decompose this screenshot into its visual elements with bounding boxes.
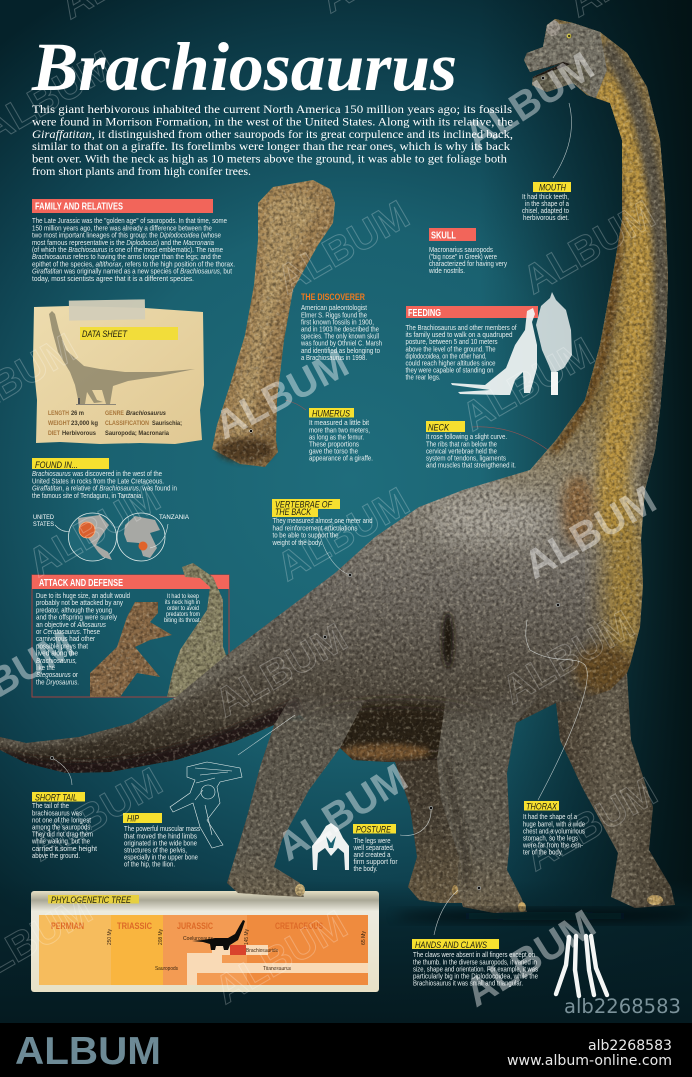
note: neck high: It had to keep [167, 594, 200, 600]
note: neck high: biting its throat. [164, 618, 201, 624]
panel: feeding: The Brachiosaurus and other members of [406, 323, 517, 332]
panel: skull: SKULL [431, 230, 456, 242]
panel: the discoverer: and identified as belonging to [301, 346, 380, 355]
panel: attack and defense: Brachiosaurus, [36, 656, 77, 665]
panel: posture: The legs were [354, 836, 390, 845]
panel: humerus: HUMERUS [312, 408, 351, 420]
panel: skull [428, 228, 507, 275]
note: neck high: predators from [166, 612, 200, 618]
dinosaur: far legs [391, 673, 675, 908]
panel: the discoverer: was found by Othniel C. Marsh [300, 339, 382, 348]
hip skeleton icon [170, 762, 242, 848]
panel: family and relatives: Giraffatitan was originally named as a new species of Brachiosaurus, but [32, 267, 232, 276]
panel: posture [353, 824, 398, 873]
panel: the discoverer: species. The only known skull [301, 332, 379, 341]
panel: phylogenetic tree: PERMIAN [51, 921, 84, 932]
watermarks: ALBUM [270, 192, 417, 303]
panel: neck: system of tendons, ligaments [426, 454, 506, 462]
footer bar: alb2268583 [588, 1038, 672, 1054]
intro text: This giant herbivorous inhabited the current North America 150 million years ago; its fossils [32, 102, 512, 116]
panel: attack and defense: Stegosaurus or [36, 670, 78, 679]
panel: data sheet: CLASSIFICATION [105, 420, 149, 427]
panel: data sheet [33, 299, 204, 444]
icon: small brachiosaurus silhouette [192, 920, 245, 950]
panel: feeding: above the level of the ground. The [406, 344, 496, 353]
panel: feeding: could reach higher altitudes since [406, 358, 496, 368]
panel: hands and claws [412, 939, 538, 988]
panel: data sheet: WEIGHT [48, 420, 70, 427]
panel: feeding: posture, between 5 and 10 meters [406, 337, 498, 346]
panel: feeding: its family used to walk on a quadruped [406, 330, 512, 339]
panel: attack and defense: an objective of Allosaurus [36, 620, 106, 629]
panel: neck: The ribs that ran below the [426, 439, 497, 448]
panel: the discoverer: THE DISCOVERER [301, 292, 365, 302]
panel: humerus: as long as the femur. [309, 432, 364, 441]
panel: humerus: more than two meters, [309, 425, 370, 434]
panel: vertebrae of the back: VERTEBRAE OF [275, 500, 333, 510]
panel: found in [32, 458, 177, 500]
panel: short tail: brachiosaurus was [32, 808, 82, 817]
watermarks: ALBUM [516, 477, 664, 588]
panel: found in: United States in rocks from the Late Cretaceous. [32, 476, 164, 485]
watermark id: alb2268583 [564, 995, 681, 1018]
panel: vertebrae of the back: THE BACK [275, 507, 311, 518]
panel: vertebrae of the back: had reinforcement articulations [272, 523, 358, 532]
panel: data sheet: Saurischia; [152, 420, 182, 427]
panel: vertebrae of the back: to be able to support the [272, 531, 338, 540]
panel: neck: and muscles that strengthened it. [426, 461, 516, 470]
ground shadow [395, 911, 692, 921]
panel: phylogenetic tree: 145 My [244, 929, 250, 945]
panel: attack and defense: the Dryosaurus. [36, 677, 79, 686]
panel: short tail: among the sauropods. [32, 822, 92, 832]
watermarks: ALBUM [494, 602, 642, 713]
panel: attack and defense: probably not be attacked by any [36, 598, 123, 607]
panel: skull: characterized for having very [429, 259, 507, 268]
intro text: Giraffatitan, it distinguished from other sauropods for its great corpulence and its inclined back, [32, 127, 513, 141]
panel: mouth [522, 182, 571, 222]
panel: found in: the famous site of Tendaguru, in Tanzania. [32, 491, 143, 500]
panel: short tail: SHORT TAIL [35, 792, 77, 804]
panel: mouth: It had thick teeth, [522, 192, 569, 201]
title: Brachiosaurus [31, 29, 457, 105]
panel: hip: that moved the hind limbs [124, 831, 197, 840]
panel: the discoverer: a Brachiosaurus in 1998. [301, 353, 367, 362]
panel: family and relatives: (of which the Brachiosaurus is one of the most emblematic). The name [32, 245, 223, 254]
panel: phylogenetic tree: 250 My [107, 929, 113, 945]
panel: humerus: gave the torso the [309, 447, 358, 456]
panel: attack and defense: and the offspring were surely [36, 613, 117, 622]
panel: hip: structures of the pelvis, [124, 846, 187, 854]
panel: feeding: they were capable of standing on [406, 366, 494, 375]
panel: the discoverer [300, 292, 382, 362]
panel: humerus: These proportions [309, 440, 359, 448]
note: neck high: order to avoid [167, 606, 199, 612]
panel: data sheet: LENGTH [48, 410, 69, 417]
watermarks: ALBUM [516, 192, 663, 303]
belly and rump shade [336, 695, 468, 755]
intro text: bent over. With the neck as high as 10 meters above the ground, it was able to get foliage both [32, 152, 507, 166]
panel: thorax: huge barrel, with a wide [523, 819, 585, 828]
panel: family and relatives: 150 million years ago, there was already a difference between the [32, 223, 212, 232]
panel: family and relatives: today, most scientists agree that it is a different species. [32, 274, 194, 283]
intro text: were found in Morrison Formation, in the west of the United States. Along with its relative, the [32, 114, 513, 128]
hands and claws bones icon [556, 936, 607, 996]
globes: United States and Tanzania: STATES [33, 521, 55, 528]
intro text [32, 102, 513, 178]
image: allosaurus [90, 602, 172, 697]
panel: attack and defense: possible preys that [36, 641, 88, 650]
panel: vertebrae of the back [272, 499, 372, 547]
image: sauropod [167, 563, 228, 697]
panel: data sheet: 23,000 kg [71, 420, 98, 427]
watermarks: ALBUM [23, 759, 170, 870]
panel: posture: firm support for [354, 857, 398, 866]
panel: thorax: ter of the body. [523, 848, 563, 857]
watermarks: ALBUM [208, 615, 355, 726]
intro text: from short plants and from high conifer trees. [32, 164, 251, 178]
panel: feeding: diplodocoidea, on the other hand, [406, 351, 486, 360]
panel: thorax: It had the shape of a [523, 812, 578, 821]
watermarks: ALBUM [270, 479, 417, 590]
panel: posture: well separated, [353, 843, 394, 852]
panel: mouth: MOUTH [539, 182, 566, 194]
panel: attack and defense: lived along the [36, 649, 78, 658]
fossil humerus bone [212, 180, 335, 467]
panel: short tail: not one of the longest [32, 815, 91, 824]
panel: family and relatives: two most important lineages of this group: the Diplodocoidea (whose [32, 231, 221, 240]
panel: the discoverer: Elmer S. Riggs found the [301, 310, 367, 319]
panel: neck: It rose following a slight curve. [426, 432, 507, 441]
panel: posture: POSTURE [356, 824, 391, 836]
panel: phylogenetic tree: Coelurosaurs [183, 936, 213, 942]
panel: humerus: It measured a little bit [309, 418, 369, 427]
panel: hands and claws: size, shape and orientation. For example, it was [413, 964, 538, 973]
panel: feeding [406, 292, 572, 395]
panel: phylogenetic tree: CRETACEOUS [275, 921, 323, 932]
watermarks: ALBUM [457, 44, 602, 160]
panel: skull: Macronarius sauropods [429, 245, 493, 254]
panel: neck: NECK [428, 422, 450, 434]
panel: family and relatives [32, 199, 235, 283]
watermarks: ALBUM [518, 769, 665, 880]
panel: thorax: were far from the cen- [522, 841, 583, 850]
watermarks: ALBUM [457, 902, 603, 1016]
panel: thorax: THORAX [526, 802, 558, 812]
panel: skull: wide nostrils. [428, 266, 465, 275]
panel: found in: Giraffatitan, a relative of Brachiosaurus, was found in [32, 484, 177, 493]
panel: feeding: the rear legs. [406, 373, 440, 382]
panel: hip [123, 813, 200, 869]
globes: United States and Tanzania: UNITED [33, 514, 54, 521]
watermarks: ALBUM [269, 756, 415, 870]
panel: hands and claws: HANDS AND CLAWS [415, 940, 488, 951]
panel: attack and defense: carnivorous had other [36, 634, 95, 643]
panel: hands and claws: the thumb. In the diverse sauropods, it varied in [413, 957, 537, 966]
panel: data sheet: 26 m [71, 410, 84, 417]
chest colour [605, 490, 645, 670]
head [524, 23, 607, 100]
panel: feeding: FEEDING [408, 308, 441, 319]
panel: the discoverer: and in 1903 he described the [301, 324, 379, 334]
panel: neck [426, 421, 516, 470]
panel: data sheet: Sauropoda; Macronaria [105, 430, 169, 437]
panel: thorax [522, 801, 585, 857]
panel: data sheet: DIET [48, 430, 60, 437]
tape [69, 299, 145, 321]
panel: attack and defense: ATTACK AND DEFENSE [39, 578, 123, 589]
panel: vertebrae of the back: They measured almost one meter and [272, 516, 372, 525]
note: neck high: its neck high in [165, 600, 200, 606]
body light [430, 494, 550, 546]
panel: hands and claws: particularly big in the Diplodocoidea, while the [413, 972, 538, 980]
panel: posture: and created a [354, 850, 391, 859]
panel: phylogenetic tree: JURASSIC [177, 921, 213, 932]
panel: data sheet: Herbivorous [62, 430, 96, 437]
panel: thorax: stomach, so the legs [523, 834, 578, 842]
panel: data sheet: DATA SHEET [82, 329, 128, 340]
footer bar: ALBUM [15, 1030, 161, 1073]
footer bar: www.album-online.com [507, 1053, 672, 1069]
panel: hip: originated in the wide bone [124, 838, 197, 847]
posture skeleton icon [312, 823, 349, 870]
panel: attack and defense: Due to its huge size, an adult would [36, 591, 130, 600]
dinosaur: body, tail and neck [0, 0, 692, 800]
globes: United States and Tanzania [33, 513, 190, 561]
panel: thorax: chest and a voluminous [523, 826, 585, 835]
panel: family and relatives: The Late Jurassic was the "golden age" of sauropods. In that time, some [32, 216, 227, 225]
panel: phylogenetic tree [31, 891, 379, 992]
panel: the discoverer: first known fossils in 1900, [301, 317, 374, 326]
panel: skull: ("big nose" in Greek) were [429, 252, 497, 261]
panel: phylogenetic tree: Titanosaurus [263, 966, 291, 972]
callout lines [52, 103, 587, 935]
panel: phylogenetic tree: Brachiosaurids [246, 948, 278, 954]
panel: posture: the body. [354, 864, 378, 873]
panel: phylogenetic tree: 208 My [158, 929, 164, 945]
panel: vertebrae of the back: weight of the body. [272, 538, 322, 547]
neck shading [600, 80, 639, 540]
panel: data sheet: Brachiosaurus [126, 410, 166, 417]
panel: found in: FOUND IN... [35, 460, 78, 471]
panel: hip: HIP [127, 814, 139, 824]
tree branches [155, 945, 368, 985]
watermarks: ALBUM [454, 329, 602, 440]
intro text: similar to that on a giraffe. Its forelimbs were longer than the rear ones, which is why its back [32, 139, 510, 153]
icon: rearing skeleton and tree [451, 292, 572, 395]
panel: short tail: The tail of the [32, 801, 69, 810]
panel: mouth: herbivorous diet. [523, 213, 569, 222]
panel: family and relatives: epithet of the species, altithorax, refers to the high position of the thorax. [32, 259, 235, 268]
note: neck high [164, 594, 201, 624]
panel: phylogenetic tree: PHYLOGENETIC TREE [51, 895, 132, 906]
panel: humerus [309, 408, 373, 463]
callout dots [50, 76, 560, 890]
panel: the discoverer: American paleontologist [301, 303, 367, 312]
footer bar [0, 1023, 692, 1077]
panel: family and relatives: FAMILY AND RELATIVES [35, 202, 123, 212]
mini dinosaur [49, 311, 195, 404]
panel: hip: of the hip, the Ilion. [124, 860, 175, 869]
dinosaur: near legs [227, 690, 545, 913]
panel: short tail: carried it some height [32, 844, 97, 853]
panel: mouth: chisel, adapted to [522, 206, 569, 215]
panel: humerus: appearance of a giraffe. [309, 454, 373, 463]
panel: found in: Brachiosaurus was discovered in the west of the [32, 469, 162, 478]
panel: hip: The powerful muscular mass [124, 824, 200, 833]
panel: short tail: while walking, but the [31, 837, 90, 846]
panel: short tail: above the ground. [32, 851, 80, 860]
panel: attack and defense: or Ceratosaurus. These [36, 627, 100, 636]
panel: attack and defense [32, 563, 229, 697]
panel: attack and defense: like the [36, 663, 55, 672]
panel: short tail: They did not drag them [32, 830, 93, 839]
panel: mouth: in the shape of a [525, 199, 570, 208]
panel: attack and defense: predator, although the young [36, 605, 112, 614]
panel: hip: especially in the upper bone [124, 853, 198, 862]
watermarks: ALBUM [21, 475, 168, 586]
panel: family and relatives: most famous representative is the Diplodocus) and the Macronaria [32, 238, 214, 247]
panel: phylogenetic tree: TRIASSIC [117, 921, 152, 932]
panel: phylogenetic tree: 65 My [361, 931, 367, 945]
panel: hands and claws: The claws were absent in all fingers except on [413, 950, 535, 959]
panel: hands and claws: Brachiosaurus it was small and triangular. [413, 979, 523, 988]
panel: short tail [31, 792, 97, 860]
watermarks: ALBUM [208, 902, 355, 1013]
panel: family and relatives: Brachiosaurus refers to having the arms longer than the legs; and the [32, 252, 221, 261]
panel: phylogenetic tree: Sauropods [155, 966, 178, 972]
panel: neck: cervical vertebrae held the [426, 446, 497, 455]
globes: United States and Tanzania: TANZANIA [159, 514, 190, 521]
watermarks: ALBUM [208, 341, 356, 448]
panel: data sheet: GENRE [105, 410, 125, 417]
